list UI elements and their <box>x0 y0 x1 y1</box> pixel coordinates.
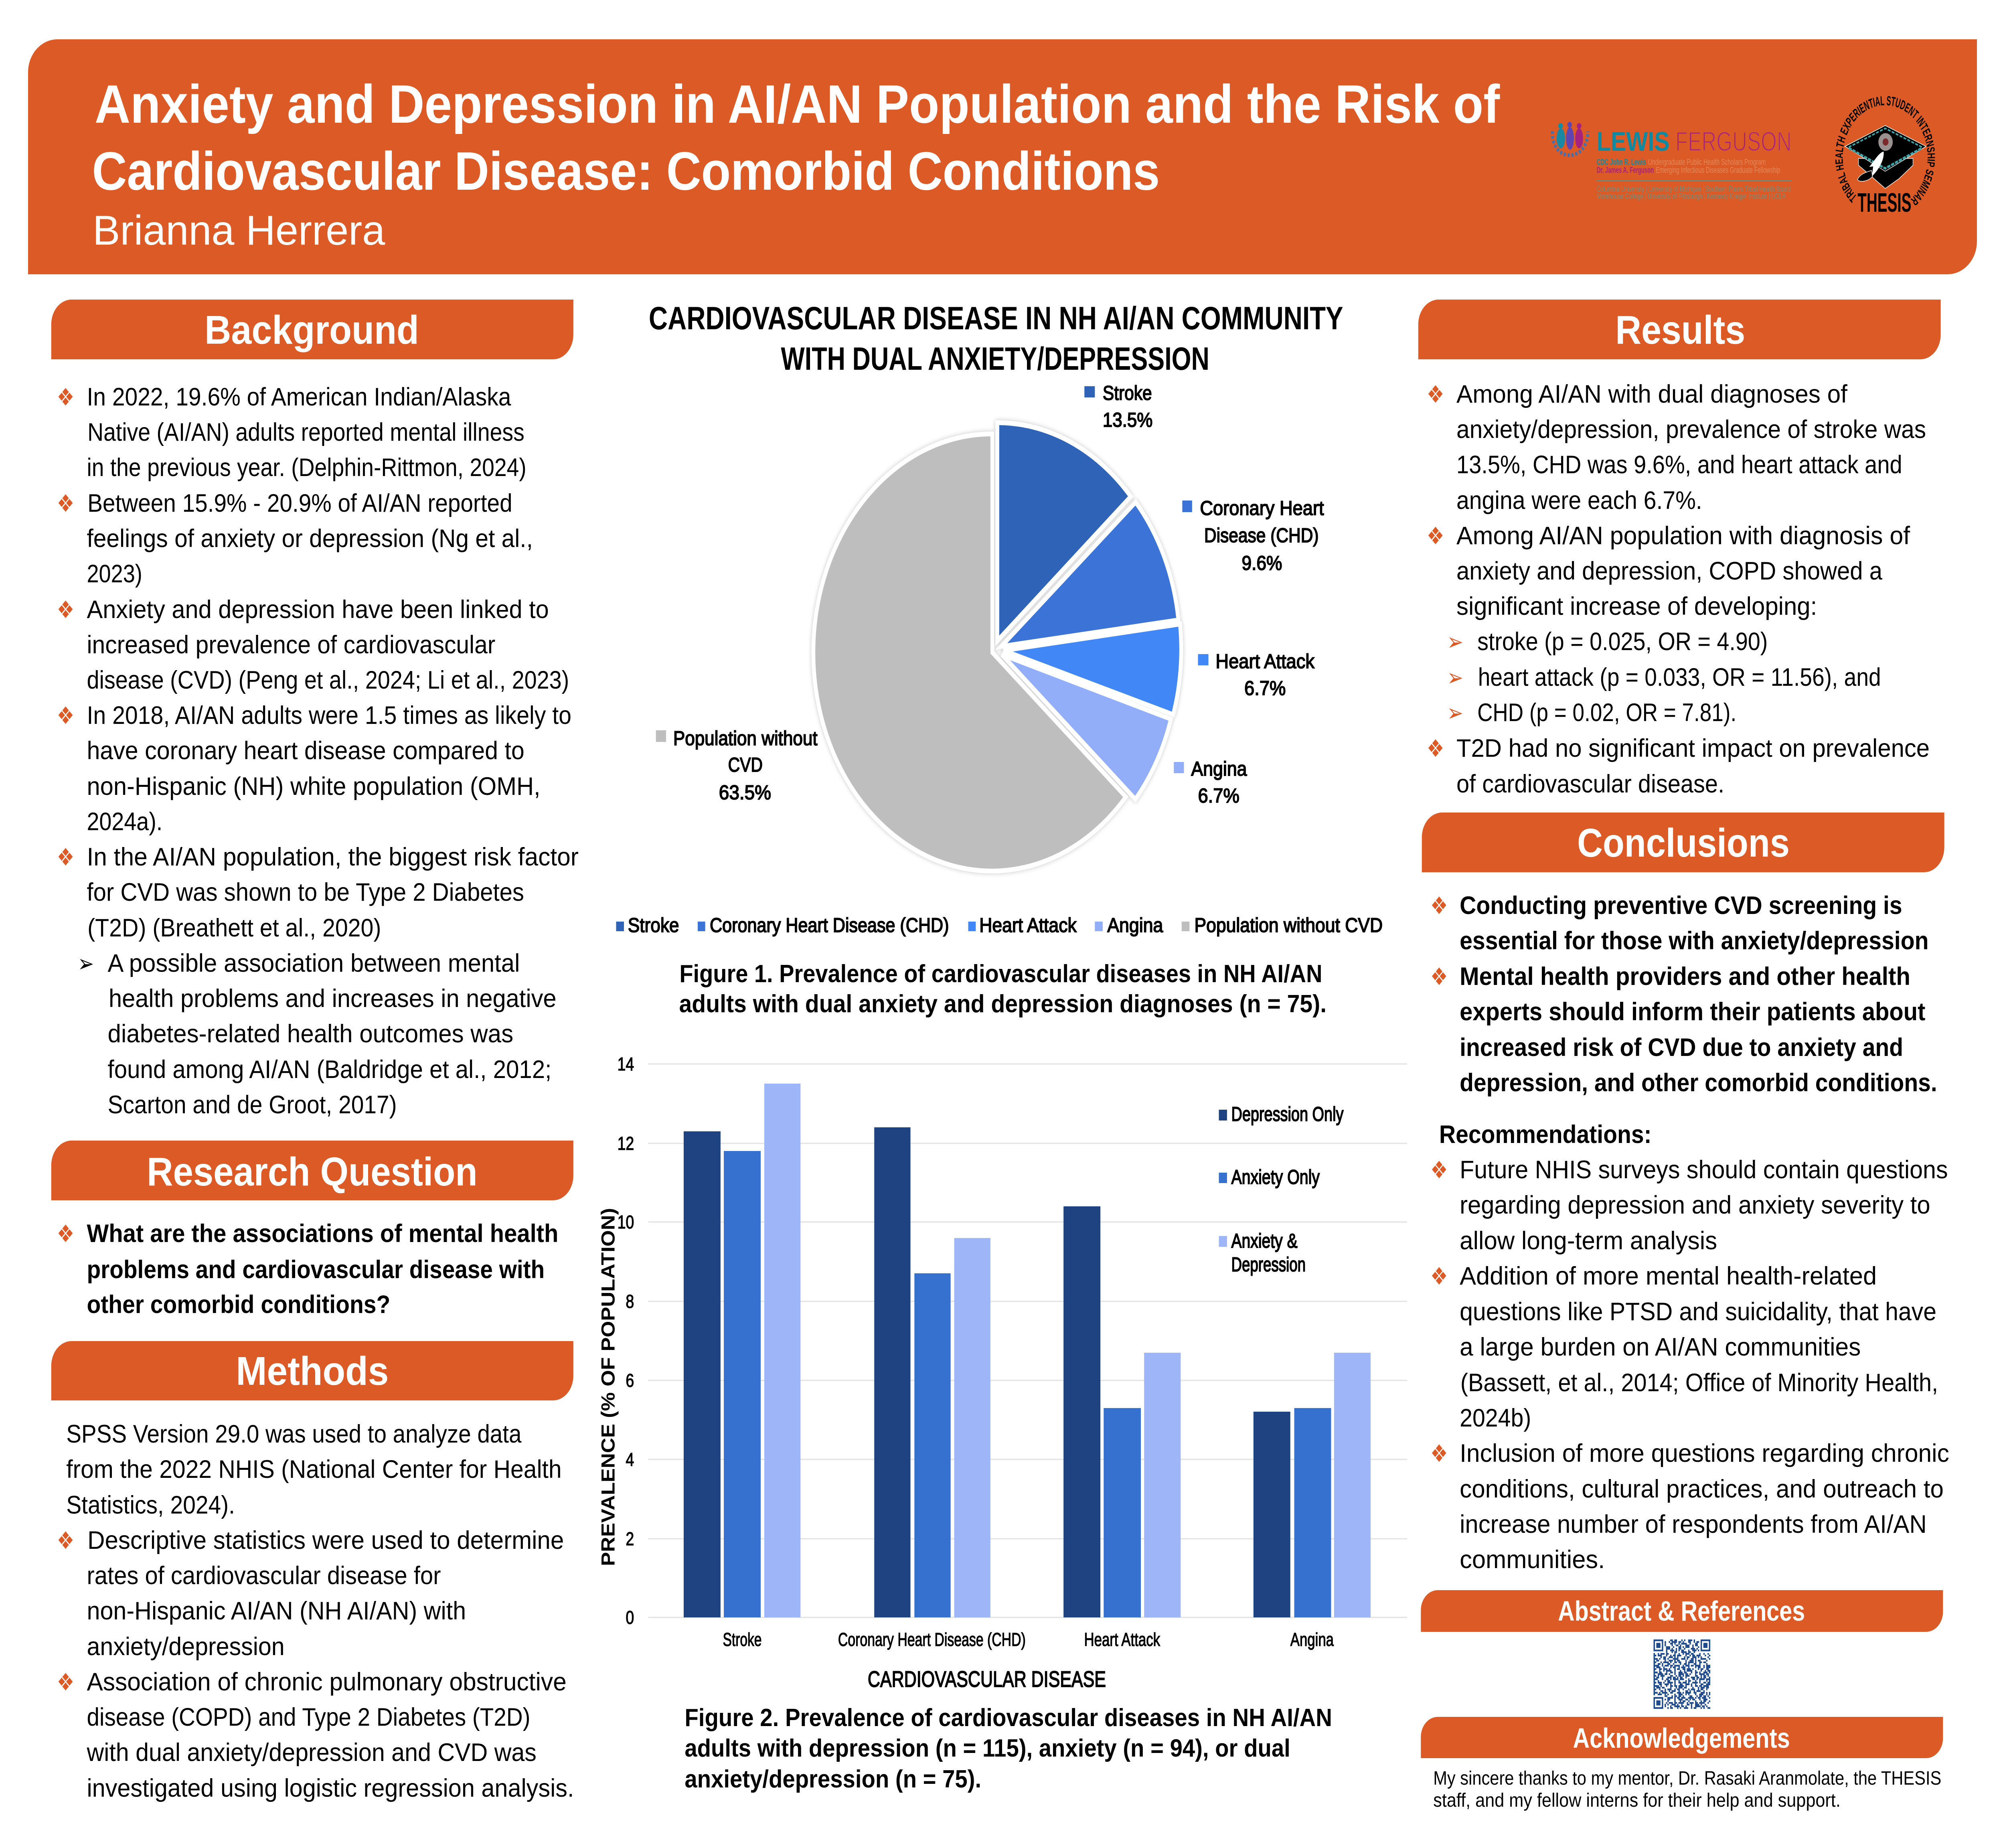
y axis tick labels: 6 <box>626 1370 634 1391</box>
author: Brianna Herrera <box>93 207 385 254</box>
text block: results <box>1427 380 1930 798</box>
pie legend: Coronary Heart Disease (CHD) <box>710 914 949 936</box>
logo: Lewis Ferguson: FERGUSON <box>1675 127 1792 157</box>
text block: methods: from the 2022 NHIS (National Center for Health <box>66 1455 562 1483</box>
text block: methods: non-Hispanic AI/AN (NH AI/AN) with <box>87 1597 466 1625</box>
bar chart legend: Depression <box>1231 1253 1306 1276</box>
bar chart <box>618 1054 1407 1650</box>
text block: methods: Descriptive statistics were used to determine <box>87 1526 564 1554</box>
x axis category labels <box>723 1629 1334 1650</box>
pie label: coronary heart disease: Coronary Heart <box>1200 497 1324 519</box>
text block: background bullets: ❖ <box>57 596 74 624</box>
text block: conclusions: ❖ <box>1430 892 1448 920</box>
heading: research question <box>51 1141 573 1200</box>
text block: methods: Association of chronic pulmonary obstructive <box>87 1668 567 1696</box>
text block: recommendations: a large burden on AI/AN communities <box>1460 1333 1861 1361</box>
text block: results: T2D had no significant impact on prevalence <box>1456 734 1930 762</box>
text block: recommendations: Addition of more mental health-related <box>1460 1262 1877 1290</box>
pie label: stroke: Stroke <box>1103 382 1152 404</box>
text block: background bullets: ❖ <box>57 701 74 729</box>
y axis tick labels: 14 <box>618 1054 634 1074</box>
text block: background bullets: (T2D) (Breathett et al., 2020) <box>87 914 381 942</box>
text block: recommendations: ❖ <box>1430 1439 1448 1467</box>
text block: results: ❖ <box>1427 734 1444 762</box>
y axis tick labels <box>618 1054 634 1628</box>
logo: Lewis Ferguson: Undergraduate Public Health Scholars Program <box>1648 158 1766 167</box>
text block: recommendations: 2024b) <box>1460 1404 1531 1432</box>
text block: results: heart attack (p = 0.033, OR = 11.56), and <box>1478 663 1881 691</box>
y axis tick labels: 4 <box>626 1449 634 1470</box>
panel: background <box>51 300 579 1119</box>
text block: recommendations: ❖ <box>1430 1156 1448 1184</box>
text block: methods: with dual anxiety/depression and CVD was <box>86 1739 537 1767</box>
text block: acknowledgements: staff, and my fellow interns for their help and support. <box>1433 1789 1841 1811</box>
heading: results: Results <box>1615 308 1745 353</box>
text block: conclusions: depression, and other comorbid conditions. <box>1460 1069 1937 1097</box>
text block: methods: ❖ <box>57 1526 74 1554</box>
text block: background bullets: Between 15.9% - 20.9% of AI/AN reported <box>87 489 512 517</box>
text block: results: significant increase of developing: <box>1456 592 1817 620</box>
text block: recommendations: increase number of respondents from AI/AN <box>1460 1510 1927 1538</box>
chart title: WITH DUAL ANXIETY/DEPRESSION <box>781 340 1209 377</box>
pie label: population without CVD <box>656 727 818 804</box>
text block: results: of cardiovascular disease. <box>1456 770 1724 798</box>
header banner <box>28 39 1977 274</box>
heading: acknowledgements: Acknowledgements <box>1573 1722 1790 1754</box>
heading: abstract and references: Abstract & References <box>1558 1595 1805 1627</box>
text block: methods: disease (COPD) and Type 2 Diabetes (T2D) <box>87 1703 530 1731</box>
text block: research question: ❖ <box>57 1220 74 1248</box>
text block: methods: anxiety/depression <box>87 1633 285 1661</box>
text block: results: ➢ <box>1447 628 1463 656</box>
bar chart legend: Depression Only <box>1231 1103 1344 1125</box>
text block: results: CHD (p = 0.02, OR = 7.81). <box>1477 699 1736 727</box>
figure 2 caption: Figure 2. Prevalence of cardiovascular diseases in NH AI/AN <box>685 1704 1332 1731</box>
text block: background bullets: 2024a). <box>87 808 162 836</box>
text block: background bullets: for CVD was shown to be Type 2 Diabetes <box>87 878 524 906</box>
text block: background bullets: feelings of anxiety or depression (Ng et al., <box>87 525 533 553</box>
text block: background bullets: diabetes-related health outcomes was <box>108 1020 513 1048</box>
text block: background bullets: In the AI/AN population, the biggest risk factor <box>87 843 579 871</box>
text block: results: ❖ <box>1427 522 1444 550</box>
pie label: coronary heart disease <box>1182 497 1324 574</box>
x axis category labels: Coronary Heart Disease (CHD) <box>838 1629 1026 1650</box>
y axis tick labels: 10 <box>618 1212 634 1232</box>
text block: recommendations: allow long-term analysis <box>1460 1227 1717 1255</box>
text block: results: Among AI/AN population with diagnosis of <box>1456 522 1910 550</box>
logo: THESIS: THESIS <box>1857 188 1911 217</box>
y axis tick labels: 0 <box>626 1607 634 1628</box>
title: Anxiety and Depression in AI/AN Population and the Risk of <box>95 74 1500 135</box>
x axis category labels: Stroke <box>723 1629 761 1650</box>
panel: methods <box>51 1341 574 1802</box>
text block: recommendations: ❖ <box>1430 1262 1448 1290</box>
text block: acknowledgements: My sincere thanks to my mentor, Dr. Rasaki Aranmolate, the THESIS <box>1433 1767 1941 1789</box>
text block: recommendations <box>1430 1156 1949 1574</box>
pie label: stroke <box>1084 382 1152 431</box>
pie legend: Population without CVD <box>1195 914 1383 936</box>
text block: conclusions: essential for those with anxiety/depression <box>1460 927 1929 955</box>
text block: conclusions: experts should inform their patients about <box>1460 998 1925 1026</box>
text block: results: stroke (p = 0.025, OR = 4.90) <box>1477 628 1768 656</box>
bar chart legend <box>1219 1103 1344 1276</box>
text block: background bullets: A possible association between mental <box>108 949 520 977</box>
heading: conclusions <box>1422 813 1944 872</box>
bars: coronary heart disease <box>874 1127 990 1617</box>
bar chart legend: Anxiety & <box>1231 1230 1298 1252</box>
pie label: stroke: 13.5% <box>1103 409 1152 431</box>
text block: research question: problems and cardiovascular disease with <box>87 1256 545 1284</box>
pie label: coronary heart disease: Disease (CHD) <box>1204 524 1319 547</box>
pie label: angina <box>1174 758 1247 807</box>
logo: Lewis Ferguson: Morehouse College | University of Pittsburgh | Kennedy Krieger Institute | UCLA <box>1597 191 1786 201</box>
pie label: angina: Angina <box>1191 758 1247 780</box>
y axis title: PREVALENCE (% OF POPULATION) <box>597 1208 619 1566</box>
heading: methods: Methods <box>236 1349 389 1394</box>
text block: results: 13.5%, CHD was 9.6%, and heart attack and <box>1456 451 1902 479</box>
heading: methods <box>51 1341 573 1400</box>
logo: Lewis Ferguson: Columbia University | University of Michigan | Southern Plains Tribal Health Board <box>1597 184 1790 193</box>
text block: methods: ❖ <box>57 1668 74 1696</box>
text block: background bullets: increased prevalence of cardiovascular <box>87 631 495 659</box>
panel: abstract and references <box>1421 1590 1943 1709</box>
pie label: population without CVD: Population without <box>673 727 818 750</box>
text block: acknowledgements <box>1433 1767 1941 1811</box>
heading: conclusions: Conclusions <box>1577 821 1790 865</box>
text block: conclusions: Conducting preventive CVD screening is <box>1460 892 1902 920</box>
text block: background bullets: ❖ <box>57 383 74 411</box>
panel: pie chart figure <box>616 300 1383 1017</box>
heading: abstract and references <box>1421 1590 1943 1632</box>
text block: recommendations: questions like PTSD and suicidality, that have <box>1460 1298 1936 1326</box>
panel: acknowledgements <box>1421 1717 1943 1811</box>
text block: results: ❖ <box>1427 380 1444 408</box>
heading: background: Background <box>205 308 419 353</box>
y axis tick labels: 12 <box>618 1133 634 1154</box>
text block: methods: Statistics, 2024). <box>66 1491 235 1519</box>
pie legend: Heart Attack <box>979 914 1077 936</box>
y axis tick labels: 8 <box>626 1291 634 1312</box>
text block: research question: other comorbid conditions? <box>87 1291 390 1319</box>
text block: background bullets: found among AI/AN (Baldridge et al., 2012; <box>108 1056 551 1084</box>
figure 2 caption: anxiety/depression (n = 75). <box>685 1765 981 1793</box>
text block: background bullets: ❖ <box>57 489 74 517</box>
figure 1 caption: Figure 1. Prevalence of cardiovascular diseases in NH AI/AN <box>679 960 1322 987</box>
text block: conclusions <box>1430 892 1937 1097</box>
bars: angina <box>1254 1353 1371 1617</box>
bars: heart attack <box>1063 1206 1181 1617</box>
text block: background bullets: In 2018, AI/AN adults were 1.5 times as likely to <box>87 701 571 729</box>
text block: recommendations: communities. <box>1460 1546 1605 1574</box>
panel: research question <box>51 1141 573 1319</box>
x axis title: CARDIOVASCULAR DISEASE <box>868 1667 1106 1692</box>
text block: conclusions: Mental health providers and other health <box>1460 962 1910 991</box>
text block: research question <box>57 1220 558 1319</box>
chart title <box>649 300 1343 377</box>
x axis category labels: Angina <box>1290 1629 1334 1650</box>
heading: background <box>51 300 573 359</box>
text block: methods: investigated using logistic regression analysis. <box>87 1774 574 1802</box>
text block: background bullets: In 2022, 19.6% of American Indian/Alaska <box>87 383 511 411</box>
pie legend <box>616 914 1383 936</box>
pie label: angina: 6.7% <box>1198 784 1239 807</box>
pie chart <box>813 423 1181 871</box>
panel: bar chart figure <box>597 1054 1407 1793</box>
text block: results: angina were each 6.7%. <box>1456 486 1702 515</box>
text block: results: ➢ <box>1447 699 1463 727</box>
text block: results: anxiety/depression, prevalence of stroke was <box>1456 415 1926 444</box>
y axis tick labels: 2 <box>626 1528 634 1549</box>
text block: background bullets: Anxiety and depression have been linked to <box>87 596 549 624</box>
figure 1 caption: adults with dual anxiety and depression diagnoses (n = 75). <box>679 990 1327 1017</box>
logo: THESIS: TRIBAL HEALTH EXPERIENTIAL STUDENT INTERNSHIP SEMINAR <box>1833 94 1937 208</box>
pie label: coronary heart disease: 9.6% <box>1242 552 1282 574</box>
logo: Lewis Ferguson: Dr. James A. Ferguson <box>1597 166 1654 175</box>
text block: research question: What are the associations of mental health <box>87 1220 558 1248</box>
figure 1 caption <box>679 960 1327 1017</box>
text block: background bullets: ➢ <box>78 949 94 977</box>
pie label: heart attack <box>1198 650 1314 699</box>
logo: Lewis Ferguson <box>1552 122 1792 201</box>
pie label: heart attack: 6.7% <box>1244 677 1286 699</box>
text block: background bullets: health problems and increases in negative <box>109 985 557 1013</box>
heading: recommendations: Recommendations: <box>1439 1121 1652 1149</box>
logo: Lewis Ferguson: Emerging Infectious Diseases Graduate Fellowship <box>1656 166 1780 175</box>
text block: methods: SPSS Version 29.0 was used to analyze data <box>66 1420 522 1448</box>
title: Cardiovascular Disease: Comorbid Conditions <box>92 141 1160 202</box>
pie label: population without CVD: CVD <box>728 754 763 776</box>
text block: background bullets: Scarton and de Groot, 2017) <box>108 1091 397 1119</box>
text block: background bullets: 2023) <box>87 560 142 588</box>
text block: results: ➢ <box>1447 663 1463 691</box>
panel: conclusions <box>1422 813 1949 1574</box>
text block: background bullets: have coronary heart disease compared to <box>87 737 525 765</box>
title <box>92 74 1500 202</box>
bars: stroke <box>684 1084 800 1617</box>
text block: background bullets: Native (AI/AN) adults reported mental illness <box>87 418 525 446</box>
x axis category labels: Heart Attack <box>1084 1629 1160 1650</box>
text block: recommendations: Inclusion of more questions regarding chronic <box>1460 1439 1949 1467</box>
text block: recommendations: regarding depression and anxiety severity to <box>1460 1191 1930 1219</box>
text block: conclusions: ❖ <box>1430 962 1448 991</box>
pie label: population without CVD: 63.5% <box>719 781 771 804</box>
pie legend: Stroke <box>628 914 679 936</box>
pie legend: Angina <box>1107 914 1163 936</box>
text block: recommendations: conditions, cultural practices, and outreach to <box>1460 1475 1944 1503</box>
text block: results: Among AI/AN with dual diagnoses of <box>1456 380 1848 408</box>
pie label: heart attack: Heart Attack <box>1215 650 1314 673</box>
text block: background bullets: non-Hispanic (NH) white population (OMH, <box>87 772 541 800</box>
text block: conclusions: increased risk of CVD due to anxiety and <box>1460 1033 1903 1062</box>
text block: recommendations: Future NHIS surveys should contain questions <box>1460 1156 1948 1184</box>
logo: Lewis Ferguson: CDC John R. Lewis <box>1597 158 1646 167</box>
chart title: CARDIOVASCULAR DISEASE IN NH AI/AN COMMUNITY <box>649 300 1343 336</box>
bar chart legend: Anxiety Only <box>1231 1166 1320 1188</box>
text block: results: anxiety and depression, COPD showed a <box>1456 557 1882 585</box>
text block: background bullets: in the previous year. (Delphin-Rittmon, 2024) <box>87 454 527 482</box>
heading: acknowledgements <box>1421 1717 1943 1758</box>
figure 2 caption: adults with depression (n = 115), anxiety (n = 94), or dual <box>685 1734 1290 1762</box>
heading: research question: Research Question <box>147 1149 478 1194</box>
logo: Lewis Ferguson: LEWIS <box>1597 127 1669 157</box>
icon: QR code <box>1654 1639 1710 1709</box>
text block: background bullets: disease (CVD) (Peng et al., 2024; Li et al., 2023) <box>87 666 569 694</box>
figure 2 caption <box>685 1704 1332 1793</box>
QR finder marks <box>1654 1639 1710 1709</box>
text block: methods: rates of cardiovascular disease for <box>87 1562 441 1590</box>
text block: recommendations: (Bassett, et al., 2014; Office of Minority Health, <box>1460 1369 1938 1397</box>
text block: methods <box>57 1420 574 1802</box>
panel: results <box>1418 300 1941 798</box>
text block: background bullets: ❖ <box>57 843 74 871</box>
heading: results <box>1418 300 1941 359</box>
text block: background bullets <box>57 383 579 1119</box>
